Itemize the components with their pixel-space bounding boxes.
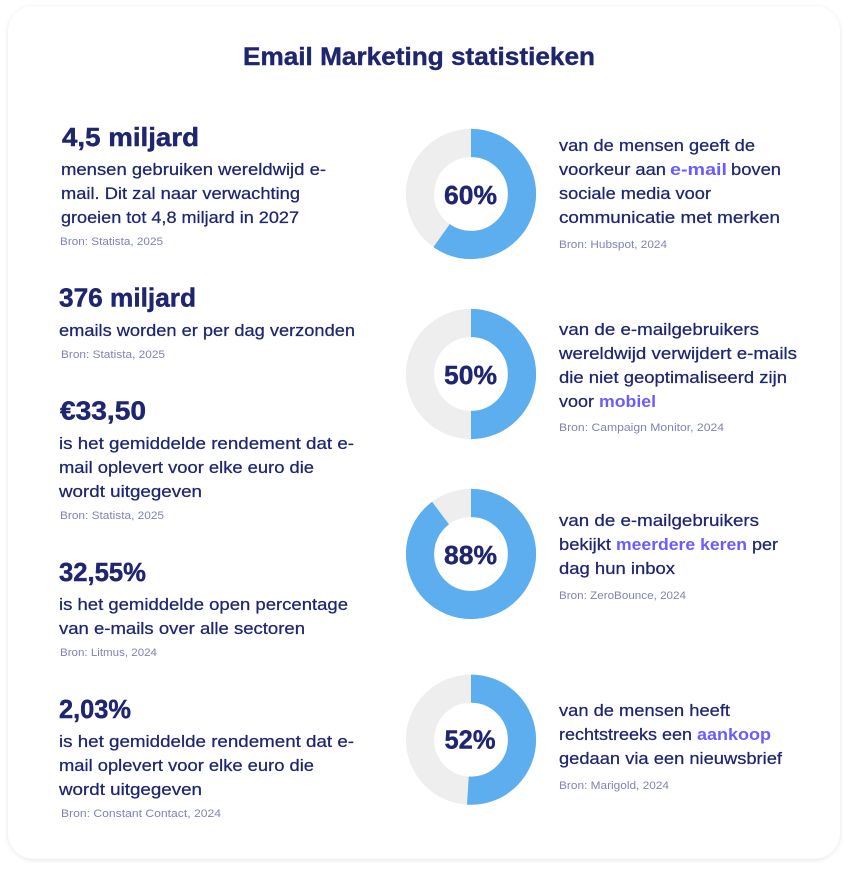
text: 60% description: sociale media voor	[559, 185, 712, 203]
donut chart: 88%: 88%	[444, 540, 497, 570]
text: €33,50 description: mail oplevert voor elke euro die	[59, 459, 314, 477]
heading: 32,55%: 32,55%	[59, 557, 146, 587]
text: 50% description: van de e-mailgebruikers	[559, 321, 759, 339]
text: €33,50 description: is het gemiddelde rendement dat e-	[59, 435, 354, 453]
panel: 32,55%	[59, 557, 348, 659]
text: 4,5 miljard description	[61, 161, 326, 227]
title: Email Marketing statistieken	[243, 43, 595, 71]
text: 4,5 miljard description: groeien tot 4,8 miljard in 2027	[61, 209, 299, 227]
text: 376 miljard description: emails worden er per dag verzonden	[59, 322, 355, 340]
panel: 4,5 miljard	[60, 122, 326, 248]
text: 2,03% description	[58, 733, 354, 799]
text: 88% description	[559, 512, 779, 578]
donut chart: 50%	[420, 323, 522, 425]
text: 50% description: voor	[559, 393, 595, 411]
source: Bron: Statista, 2025	[61, 349, 165, 361]
source: Bron: Constant Contact, 2024	[61, 808, 221, 820]
text: 60% description: van de mensen geeft de	[559, 137, 755, 155]
panel: €33,50	[58, 396, 354, 522]
text: €33,50 description	[58, 435, 354, 501]
donut chart: 88%	[420, 503, 522, 605]
text: 50% description: wereldwijd verwijdert e-mails	[558, 345, 797, 363]
text: 52% description: gedaan via een nieuwsbrief	[559, 750, 782, 768]
text: 50% description: mobiel	[599, 393, 656, 411]
heading: 376 miljard: 376 miljard	[59, 282, 196, 312]
text: 52% description: rechtstreeks een	[559, 726, 692, 744]
text: 52% description: aankoop	[697, 726, 771, 744]
text: 32,55% description	[59, 596, 348, 638]
donut chart: 52%	[420, 689, 522, 791]
text: 88% description: bekijkt	[559, 536, 611, 554]
text: 32,55% description: van e-mails over alle sectoren	[59, 620, 305, 638]
heading: 4,5 miljard: 4,5 miljard	[62, 122, 199, 152]
source: Bron: Campaign Monitor, 2024	[559, 422, 724, 434]
heading: €33,50: €33,50	[60, 396, 146, 426]
panel: 88% explanation	[559, 512, 779, 602]
text: 60% description: voorkeur aan	[559, 161, 666, 179]
text: 88% description: meerdere keren	[616, 536, 747, 554]
panel: 376 miljard	[59, 282, 355, 361]
text: 52% description	[559, 702, 782, 768]
text: 60% description	[559, 137, 781, 227]
text: 2,03% description: mail oplevert voor elke euro die	[59, 757, 314, 775]
text: €33,50 description: wordt uitgegeven	[58, 483, 202, 501]
panel: 2,03%	[58, 694, 354, 820]
text: 60% description: e-mail	[670, 161, 727, 179]
text: 88% description: van de e-mailgebruikers	[559, 512, 759, 530]
text: 4,5 miljard description: mensen gebruiken wereldwijd e-	[61, 161, 326, 179]
text: 60% description: boven	[731, 161, 781, 179]
donut chart: 52%: 52%	[444, 724, 496, 754]
text: 50% description: die niet geoptimaliseerd zijn	[559, 369, 787, 387]
text: 50% description	[558, 321, 797, 411]
heading: 2,03%: 2,03%	[59, 694, 131, 724]
panel: 50% explanation	[558, 321, 797, 434]
source: Bron: ZeroBounce, 2024	[559, 590, 686, 602]
donut chart: 60%	[420, 143, 522, 245]
text: 60% description: communicatie met merken	[559, 209, 780, 227]
text: 2,03% description: is het gemiddelde rendement dat e-	[59, 733, 354, 751]
source: Bron: Litmus, 2024	[60, 647, 157, 659]
text: 52% description: van de mensen heeft	[559, 702, 730, 720]
text: 2,03% description: wordt uitgegeven	[58, 781, 202, 799]
source: Bron: Marigold, 2024	[559, 780, 669, 792]
source: Bron: Statista, 2025	[60, 236, 163, 248]
donut chart: 50%: 50%	[444, 360, 497, 390]
text: 32,55% description: is het gemiddelde open percentage	[59, 596, 348, 614]
donut chart: 60%: 60%	[444, 180, 497, 210]
text: 88% description: dag hun inbox	[559, 560, 676, 578]
source: Bron: Statista, 2025	[60, 510, 164, 522]
panel: 52% explanation	[559, 702, 782, 792]
text: 4,5 miljard description: mail. Dit zal naar verwachting	[61, 185, 300, 203]
panel: 60% explanation	[559, 137, 781, 251]
text: 88% description: per	[752, 536, 779, 554]
source: Bron: Hubspot, 2024	[559, 239, 667, 251]
